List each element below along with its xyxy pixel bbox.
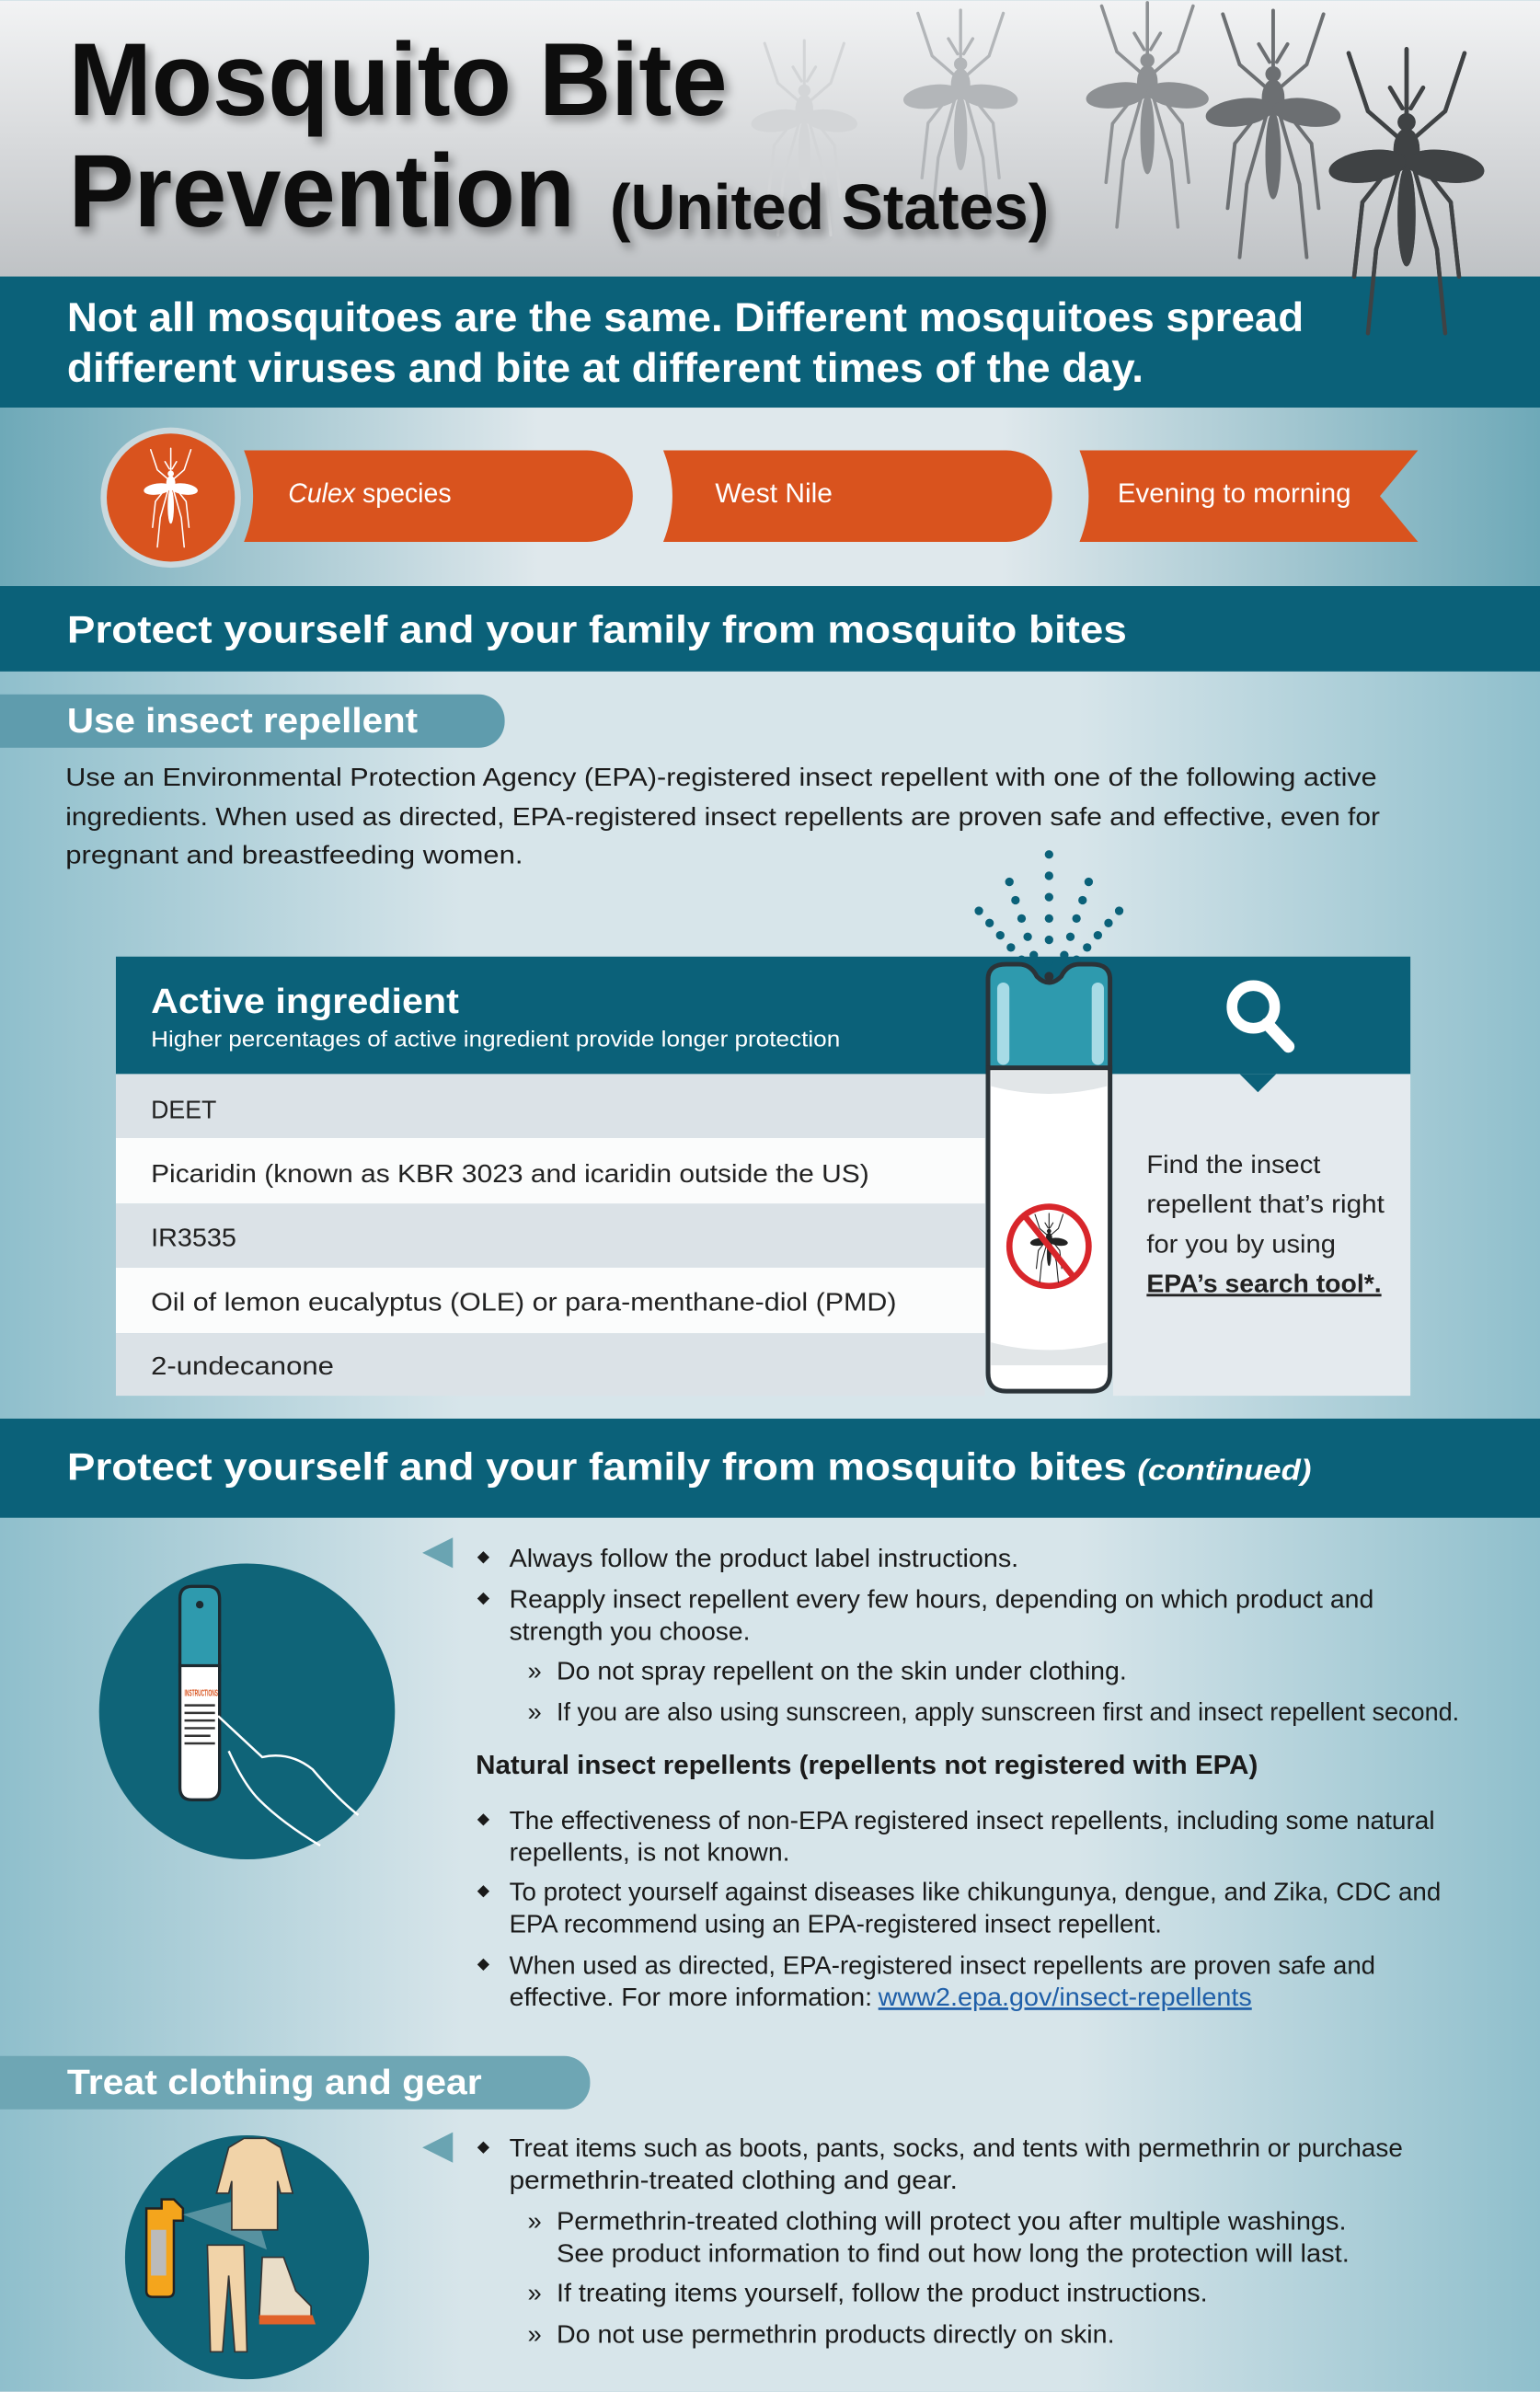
arrow pointer 1 — [422, 1537, 453, 1568]
section heading continued: (continued) — [1137, 1453, 1311, 1486]
table: active ingredients: Active ingredient — [151, 982, 459, 1021]
bullets: repellent usage: If you are also using sunscreen, apply sunscreen first and insect repellent second. — [557, 1697, 1459, 1726]
pill: virus: West Nile — [715, 478, 833, 509]
bullets: repellent usage: strength you choose. — [510, 1616, 750, 1645]
pill: species: Culex species — [288, 478, 452, 509]
pill: virus — [663, 451, 1052, 542]
intro band — [0, 277, 1540, 408]
bullets: treat clothing: » — [527, 2319, 542, 2348]
table: active ingredients: DEET — [151, 1094, 216, 1123]
bullets: treat clothing: If treating items yourself, follow the product instructions. — [557, 2279, 1208, 2307]
tab: use insect repellent: Use insect repellent — [67, 701, 418, 741]
table: active ingredients: 2-undecanone — [151, 1351, 334, 1380]
bullets: natural repellents — [477, 1806, 1441, 2011]
table: active ingredients: IR3535 — [151, 1223, 236, 1252]
search tool text: repellent that’s right — [1146, 1189, 1385, 1218]
bullets: treat clothing: Do not use permethrin products directly on skin. — [557, 2319, 1115, 2348]
bullets: natural repellents: When used as directed, EPA-registered insect repellents are proven safe and — [510, 1950, 1375, 1979]
icon: clothing and spray circle — [125, 2135, 369, 2379]
bullets: natural repellents: effective. For more information: — [510, 1983, 872, 2011]
section heading: Protect yourself and your family from mosquito bites — [67, 607, 1127, 650]
bullets: natural repellents: repellents, is not known. — [510, 1838, 790, 1867]
bullets: treat clothing: See product information to find out how long the protection will last. — [557, 2239, 1350, 2268]
title: Prevention — [69, 132, 575, 248]
icon: search magnifier — [1232, 985, 1289, 1092]
table: active ingredients: Picaridin (known as KBR 3023 and icaridin outside the US) — [151, 1158, 869, 1188]
redraw big mosquito over band — [1327, 49, 1486, 333]
paragraph — [65, 762, 1380, 869]
search tool text: for you by using — [1146, 1228, 1336, 1258]
bullets: repellent usage — [477, 1544, 1459, 1726]
intro band: different viruses and bite at different times of the day. — [67, 345, 1144, 391]
natural repellents heading: Natural insect repellents (repellents not registered with EPA) — [476, 1751, 1258, 1780]
arrow pointer 2 — [422, 2133, 453, 2163]
title — [69, 21, 1049, 248]
bullets: treat clothing: » — [527, 2207, 542, 2236]
bullets: treat clothing: Treat items such as boots, pants, socks, and tents with permethrin or purchase — [510, 2133, 1403, 2162]
tab: treat clothing — [0, 2056, 590, 2110]
search tool text: EPA’s search tool*. — [1146, 1268, 1382, 1297]
pill: time — [1079, 451, 1418, 542]
table: active ingredients — [116, 957, 1410, 1396]
bullets: repellent usage: Reapply insect repellent every few hours, depending on which product and — [510, 1585, 1373, 1614]
icon: hand pressing can circle: INSTRUCTIONS — [185, 1689, 218, 1699]
section heading continued — [0, 1419, 1540, 1518]
icon: hand pressing can circle — [99, 1563, 395, 1859]
pill: species — [244, 451, 633, 542]
header — [0, 1, 1540, 333]
bullets: repellent usage: » — [527, 1656, 542, 1685]
paragraph: pregnant and breastfeeding women. — [65, 840, 523, 869]
bullets: treat clothing: Permethrin-treated clothing will protect you after multiple washings. — [557, 2207, 1347, 2236]
title: Mosquito Bite — [69, 21, 728, 137]
paragraph: ingredients. When used as directed, EPA-registered insect repellents are proven safe and effective, even for — [65, 801, 1380, 831]
bullets: natural repellents: The effectiveness of non-EPA registered insect repellents, including some natural — [510, 1806, 1435, 1834]
section heading — [0, 586, 1540, 672]
pill: time: Evening to morning — [1118, 478, 1350, 509]
search tool text — [1146, 1149, 1385, 1297]
bullets: repellent usage: Do not spray repellent on the skin under clothing. — [557, 1656, 1127, 1685]
mosquito silhouettes — [751, 3, 1486, 333]
icon: culex mosquito circle — [100, 428, 241, 568]
table: active ingredients: Oil of lemon eucalyptus (OLE) or para-menthane-diol (PMD) — [151, 1286, 897, 1316]
bullets: treat clothing: permethrin-treated clothing and gear. — [510, 2166, 958, 2194]
title: (United States) — [610, 171, 1049, 243]
bullets: repellent usage: » — [527, 1697, 542, 1726]
species strip — [0, 408, 1540, 586]
bullets: treat clothing: » — [527, 2279, 542, 2307]
bullets: natural repellents: EPA recommend using an EPA-registered insect repellent. — [510, 1910, 1162, 1938]
icon: spray can with spray dots — [974, 850, 1123, 1391]
icon: no mosquito sign — [1009, 1207, 1088, 1286]
tab: treat clothing: Treat clothing and gear — [67, 2063, 482, 2102]
table: active ingredients: Higher percentages of active ingredient provide longer protection — [151, 1028, 840, 1052]
search tool text: Find the insect — [1146, 1149, 1321, 1179]
paragraph: Use an Environmental Protection Agency (EPA)-registered insect repellent with one of the following active — [65, 762, 1377, 791]
bullets: repellent usage: Always follow the product label instructions. — [510, 1544, 1018, 1572]
bullets: treat clothing — [477, 2133, 1403, 2348]
bullets: natural repellents: To protect yourself against diseases like chikungunya, dengue, and Zika, CDC and — [510, 1878, 1441, 1906]
section heading continued: Protect yourself and your family from mosquito bites — [67, 1444, 1127, 1488]
bullets: natural repellents: www2.epa.gov/insect-repellents — [878, 1983, 1252, 2011]
intro band: Not all mosquitoes are the same. Different mosquitoes spread — [67, 294, 1304, 340]
tab: use insect repellent — [0, 695, 505, 748]
